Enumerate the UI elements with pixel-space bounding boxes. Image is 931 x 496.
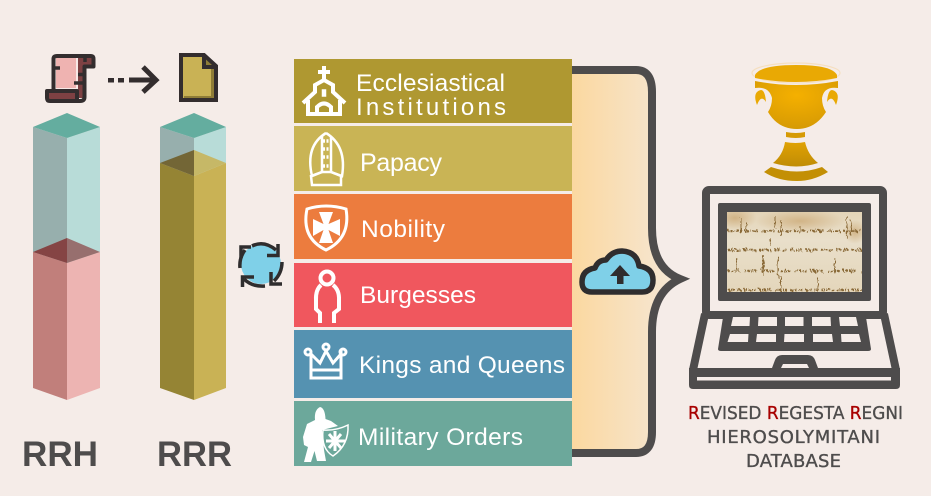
- icon: chalice: [752, 63, 840, 181]
- band: Nobility: [294, 194, 572, 259]
- laptop screen: [706, 190, 883, 315]
- band: Military Orders: [294, 401, 572, 466]
- label: RRH: RRH: [22, 435, 98, 474]
- band: Military Orders: Military Orders: [358, 424, 523, 451]
- title: Revised Regesta Regni Hierosolymitani Database: DATABASE: [746, 451, 841, 472]
- band: Ecclesiastical Institutions: Institutions: [356, 94, 506, 121]
- bar: RRH: [33, 113, 100, 400]
- title: Revised Regesta Regni Hierosolymitani Database: HIEROSOLYMITANI: [707, 427, 880, 448]
- panel: brace with gradient: [572, 70, 680, 453]
- icon: scroll: [47, 56, 94, 101]
- icon: knight with shield: [303, 407, 348, 462]
- title: Revised Regesta Regni Hierosolymitani Database: REVISED REGESTA REGNI: [688, 403, 903, 424]
- touchpad: [772, 355, 818, 368]
- band: Papacy: [294, 126, 572, 191]
- band: Kings and Queens: [294, 330, 572, 398]
- icon: church: [303, 66, 345, 114]
- band: Burgesses: Burgesses: [360, 282, 476, 309]
- manuscript image: [713, 203, 871, 301]
- keyboard: [718, 311, 871, 351]
- label: RRR: RRR: [157, 435, 232, 474]
- band: Burgesses: [294, 263, 572, 327]
- title: Revised Regesta Regni Hierosolymitani Database: [688, 403, 903, 472]
- band: Ecclesiastical Institutions: [294, 59, 572, 123]
- band: Ecclesiastical Institutions: Ecclesiastical: [356, 70, 505, 97]
- bar: RRR: [160, 113, 226, 400]
- band: Kings and Queens: Kings and Queens: [359, 352, 565, 379]
- laptop base outline: [693, 314, 896, 370]
- band: Nobility: Nobility: [361, 216, 446, 243]
- arrow: scroll to document: [108, 67, 156, 92]
- icon: crown: [305, 344, 346, 378]
- icon: cycle arrows: [240, 244, 282, 287]
- band: Papacy: Papacy: [360, 149, 442, 177]
- icon: upload cloud: [582, 251, 653, 292]
- icon: mitre: [310, 133, 343, 185]
- icon: person: [316, 272, 339, 323]
- icon: document: [181, 55, 216, 100]
- icon: laptop: [689, 190, 900, 389]
- icon: shield with cross: [306, 206, 347, 250]
